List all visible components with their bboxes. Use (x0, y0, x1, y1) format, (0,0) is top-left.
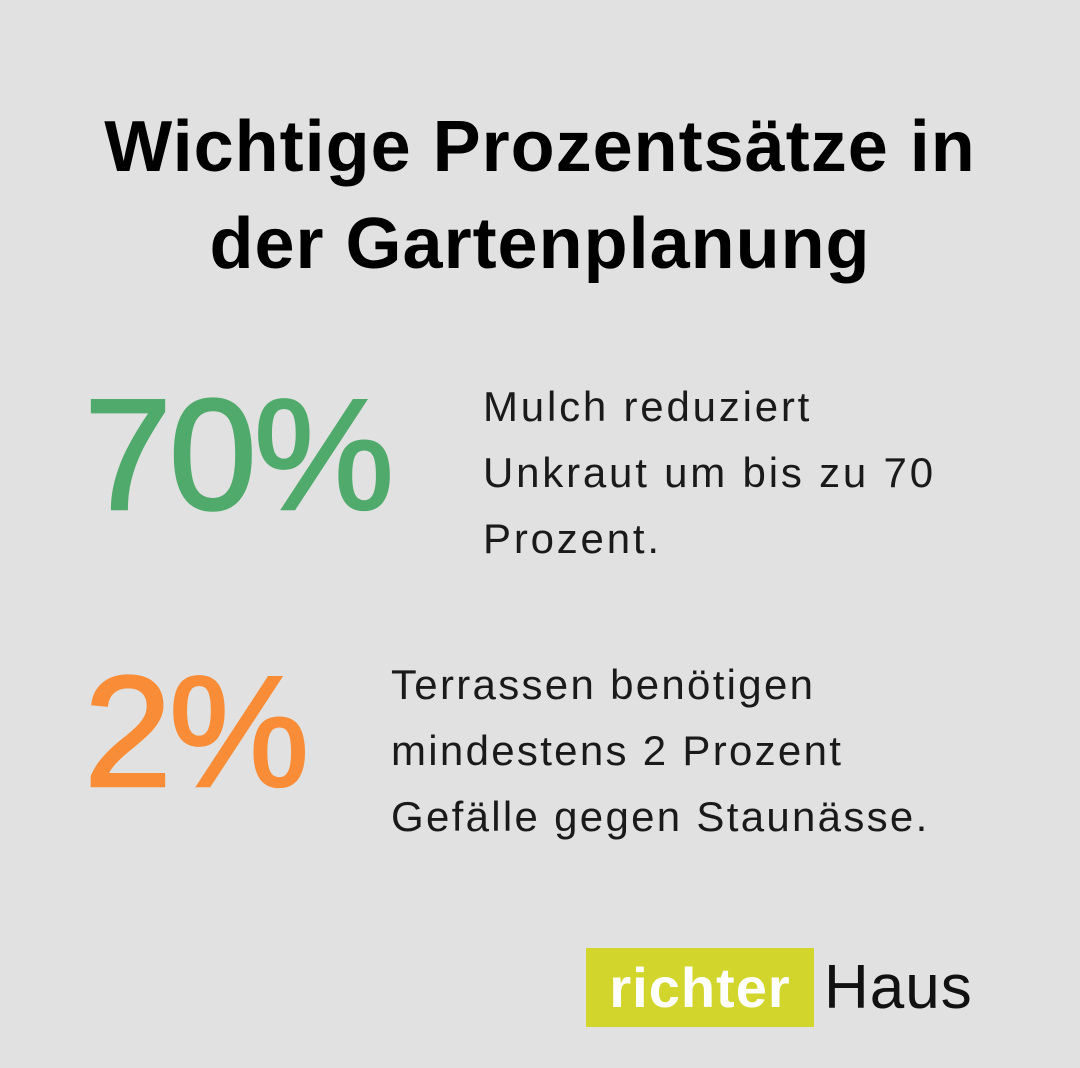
title: der Gartenplanung (209, 204, 871, 284)
title: Wichtige Prozentsätze in (104, 107, 976, 187)
text: mulch: Prozent. (483, 515, 662, 562)
text: terrassen: Gefälle gegen Staunässe. (391, 793, 930, 840)
title (104, 107, 976, 284)
text: terrassen: mindestens 2 Prozent (391, 727, 843, 774)
text: mulch (483, 383, 936, 562)
text: mulch: Mulch reduziert (483, 383, 812, 430)
text: terrassen (391, 661, 930, 840)
stat: 2%: 2% (84, 644, 306, 820)
logo box: richter (586, 948, 814, 1027)
logo box: richter: richter (609, 956, 791, 1019)
text: mulch: Unkraut um bis zu 70 (483, 449, 936, 496)
text: terrassen: Terrassen benötigen (391, 661, 815, 708)
stat: 70%: 70% (84, 367, 391, 543)
logo (586, 948, 973, 1027)
logo text: Haus: Haus (824, 953, 973, 1022)
